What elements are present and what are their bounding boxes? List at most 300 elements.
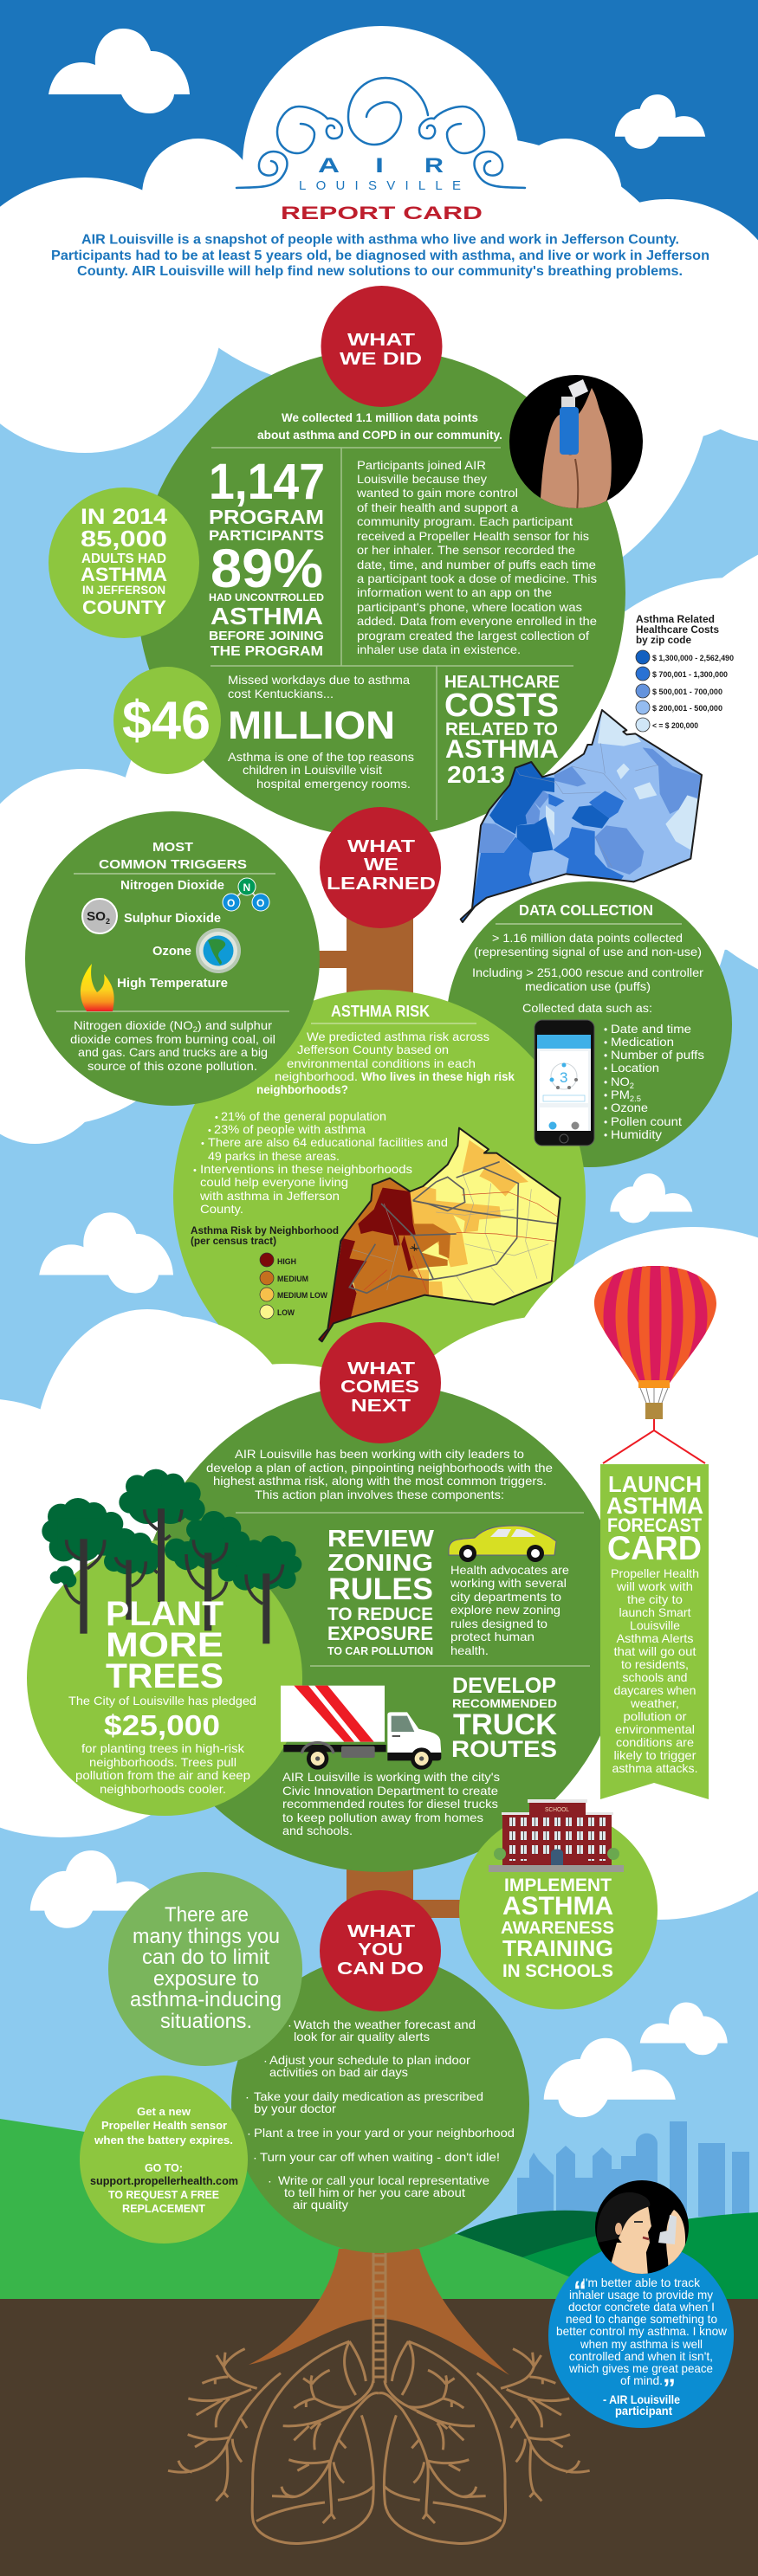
plant more trees heading: PLANT: [106, 1595, 224, 1633]
collected data list: Ozone: [611, 1101, 648, 1114]
legend: asthma risk: (per census tract): [191, 1235, 276, 1247]
trigger: high temperature: [81, 964, 228, 1011]
participants paragraph: [356, 458, 597, 656]
callout: many things you can do: can do to limit: [142, 1946, 269, 1969]
balloon hanging cord: [603, 1419, 705, 1463]
callout: replace sensor: TO REQUEST A FREE: [108, 2188, 219, 2201]
missed workdays text: MILLION: [228, 703, 395, 747]
stat: $46: [113, 667, 221, 774]
participants paragraph: Louisville because they: [357, 472, 487, 486]
callout: many things you can do: many things you: [133, 1925, 280, 1948]
trigger: ozone: [152, 928, 241, 973]
small cloud right of asthma risk: [610, 1173, 692, 1223]
small cloud top left: [49, 29, 190, 113]
asthma risk intro: Who lives in these high risk: [361, 1069, 515, 1083]
what you can do list: Turn your car off when waiting - don't idle!: [260, 2150, 500, 2164]
triggers explanation: dioxide comes from burning coal, oil: [70, 1032, 275, 1046]
data points statement: We collected 1.1 million data points: [282, 410, 478, 424]
trigger: nitrogen dioxide: O: [227, 897, 235, 909]
logo wordmark: LOUISVILLE: [299, 178, 461, 193]
collected data list: PM: [611, 1088, 629, 1101]
collected data list: 2: [630, 1081, 634, 1090]
banner body text: launch Smart: [619, 1605, 691, 1619]
what you can do list: to tell him or her you care about: [284, 2185, 465, 2199]
legend: healthcare costs: $ 200,001 - 500,000: [652, 704, 722, 713]
icon: smartphone app: [534, 1020, 594, 1146]
callout: participant quote: need to change something to: [566, 2312, 717, 2326]
missed workdays text: children in Louisville visit: [243, 763, 382, 777]
panel: asthma risk: ASTHMA RISK: [331, 1003, 430, 1020]
logo: [236, 78, 525, 188]
develop truck routes heading: TRUCK: [453, 1708, 557, 1741]
callout: participant quote: [548, 2243, 734, 2428]
data points statement: [257, 410, 502, 442]
asthma risk intro: neighborhood.: [275, 1069, 358, 1083]
intro text: [51, 232, 709, 279]
panel: plant more trees: [27, 1469, 302, 1816]
callout: many things you can do: There are: [165, 1903, 249, 1927]
what you can do list: ·: [288, 2022, 291, 2031]
trees pledge text: neighborhoods cooler.: [100, 1782, 226, 1796]
icon: school building: [489, 1799, 624, 1872]
callout: participant quote: “: [573, 2276, 586, 2305]
panel: most common triggers: [25, 811, 320, 1106]
participants paragraph: wanted to gain more control: [356, 486, 518, 500]
panel: data collection: [446, 881, 732, 1167]
callout: replace sensor: when the battery expires.: [94, 2134, 233, 2147]
heading: what comes next: NEXT: [351, 1397, 411, 1416]
stat: 85,000 adults: ADULTS HAD: [81, 552, 166, 566]
participants paragraph: of their health and support a: [357, 500, 518, 514]
asthma risk bullets: There are also 64 educational facilities and: [208, 1135, 448, 1149]
callout: participant quote: better control my asthma. I know: [556, 2324, 728, 2338]
data collection summary: > 1.16 million data points collected: [492, 931, 683, 945]
action plan intro: highest asthma risk, along with the most common triggers.: [213, 1474, 547, 1488]
review zoning rules heading: REVIEW: [327, 1525, 435, 1552]
trigger: high temperature: High Temperature: [117, 977, 228, 991]
participants paragraph: program created the largest collection of: [357, 629, 589, 642]
callout: participant quote: participant: [615, 2404, 672, 2418]
panel: implement asthma awareness training: IN SCHOOLS: [502, 1961, 613, 1981]
plant more trees heading: TREES: [106, 1657, 224, 1695]
collected data list: Humidity: [611, 1127, 662, 1141]
heading: what we learned: [320, 807, 441, 928]
banner body text: to residents,: [621, 1657, 689, 1671]
data collection summary: [472, 931, 703, 1015]
action plan intro: develop a plan of action, pinpointing neighborhoods with the: [206, 1461, 553, 1475]
trees pledge text: [68, 1694, 256, 1796]
heading: what we did: WE DID: [340, 350, 422, 369]
review zoning rules heading: EXPOSURE: [327, 1623, 433, 1644]
truck routes paragraph: to keep pollution away from homes: [282, 1811, 483, 1824]
zoning paragraph: protect human: [450, 1630, 534, 1643]
triggers explanation: [70, 1018, 275, 1073]
participants paragraph: participant's phone, where location was: [357, 600, 582, 614]
collected data list: •: [604, 1089, 607, 1101]
callout: participant quote: of mind.: [620, 2373, 663, 2387]
asthma risk intro: neighborhoods?: [256, 1082, 348, 1096]
lower white clouds: [0, 1227, 758, 1920]
what you can do list: look for air quality alerts: [294, 2030, 430, 2043]
develop truck routes heading: DEVELOP: [452, 1674, 556, 1698]
tree trunk middle section: [347, 1853, 468, 1918]
heading: what we learned: WHAT: [347, 837, 415, 856]
small cloud right lower: [544, 2038, 676, 2117]
zoning paragraph: explore new zoning: [450, 1603, 560, 1617]
banner body text: schools and: [622, 1670, 688, 1684]
heading: what you can do: YOU: [358, 1940, 403, 1959]
triggers explanation: and gas. Cars and trucks are a big: [78, 1045, 268, 1059]
callout: participant quote: inhaler usage to provide my: [569, 2288, 713, 2302]
small cloud right upper: [640, 2002, 728, 2055]
participants paragraph: Participants joined AIR: [357, 458, 486, 472]
illustration: woman using inhaler: [593, 2179, 690, 2276]
asthma risk bullets: [193, 1109, 448, 1216]
legend: asthma risk: HIGH: [277, 1257, 296, 1266]
data collection summary: Including > 251,000 rescue and controller: [472, 965, 703, 979]
stat: 85,000 adults: 85,000: [81, 526, 167, 552]
banner body text: conditions are: [616, 1735, 694, 1749]
triggers explanation: 2: [193, 1025, 198, 1034]
healthcare costs heading: COSTS: [444, 688, 559, 724]
plant more trees heading: [106, 1595, 224, 1695]
banner body text: Propeller Health: [611, 1566, 699, 1580]
missed workdays text: [228, 673, 414, 791]
action plan intro: AIR Louisville has been working with city leaders to: [235, 1447, 524, 1461]
collected data list: Date and time: [611, 1022, 691, 1036]
callout: replace sensor: [80, 2076, 248, 2244]
panel: launch asthma forecast card banner: CARD: [607, 1530, 702, 1567]
triggers explanation: Nitrogen dioxide (NO: [74, 1018, 187, 1032]
review zoning rules heading: [327, 1525, 435, 1657]
icon: school building: SCHOOL: [545, 1805, 569, 1813]
what you can do list: Plant a tree in your yard or your neighborhood: [254, 2126, 515, 2140]
panel: what comes next: [137, 1384, 625, 1872]
develop truck routes heading: ROUTES: [451, 1736, 557, 1762]
heading: what we learned: WE: [364, 855, 398, 875]
callout: many things you can do: situations.: [160, 2010, 252, 2033]
banner body text: environmental: [615, 1722, 695, 1736]
truck routes paragraph: recommended routes for diesel trucks: [282, 1797, 498, 1811]
banner body text: the city to: [627, 1592, 683, 1606]
trachea ladder: [373, 2250, 385, 2383]
collected data list: Number of puffs: [611, 1048, 704, 1062]
triggers explanation: ) and sulphur: [198, 1018, 272, 1032]
collected data list: •: [604, 1076, 607, 1088]
collected data list: Medication: [611, 1035, 674, 1049]
stat: 1,147 participants, 89%: PROGRAM: [209, 506, 324, 528]
stat: 85,000 adults: [49, 487, 199, 638]
what you can do list: Write or call your local representative: [278, 2173, 489, 2187]
participants paragraph: inhaler use data in existence.: [357, 642, 521, 656]
review zoning rules heading: TO REDUCE: [327, 1604, 433, 1624]
top white clouds: [0, 26, 758, 558]
callout: replace sensor: support.propellerhealth.com: [90, 2174, 238, 2187]
title: REPORT CARD: [281, 203, 483, 223]
stat: 1,147 participants, 89%: ASTHMA: [211, 603, 323, 629]
intro text: Participants had to be at least 5 years old, be diagnosed with asthma, and live or work in Jefferson: [51, 249, 709, 263]
asthma risk bullets: 49 parks in these areas.: [208, 1149, 340, 1163]
legend: healthcare costs: Asthma Related: [636, 615, 715, 625]
collected data list: •: [604, 1102, 607, 1114]
participants paragraph: community program. Each participant: [357, 514, 573, 528]
callout: participant quote: I'm better able to track: [582, 2276, 701, 2289]
asthma risk bullets: 23% of people with asthma: [214, 1122, 366, 1136]
participants paragraph: added. Data from everyone enrolled in the: [357, 614, 597, 628]
photo: hand with inhaler: [509, 375, 643, 508]
healthcare costs heading: RELATED TO: [445, 720, 558, 739]
banner body text: pollution or: [624, 1709, 687, 1723]
trigger: sulphur dioxide: 2: [106, 917, 110, 926]
legend: healthcare costs: [636, 615, 734, 732]
asthma risk intro: environmental conditions in each: [287, 1056, 476, 1070]
trees pledge text: neighborhoods. Trees pull: [89, 1755, 236, 1769]
data collection summary: medication use (puffs): [525, 979, 651, 993]
truck routes paragraph: AIR Louisville is working with the city's: [282, 1770, 500, 1784]
panel: implement asthma awareness training: TRAINING: [502, 1935, 613, 1961]
map: asthma risk by neighborhood: [318, 1127, 561, 1342]
collected data list: [604, 1022, 704, 1141]
panel: launch asthma forecast card banner: LAUNCH: [608, 1471, 702, 1497]
truck routes paragraph: Civic Innovation Department to create: [282, 1784, 498, 1798]
stat: 85,000 adults: IN JEFFERSON: [82, 583, 165, 597]
collected data list: •: [604, 1129, 607, 1141]
healthcare costs heading: 2013: [447, 761, 505, 788]
asthma risk intro: [256, 1030, 515, 1096]
action plan intro: [206, 1447, 553, 1501]
zoning paragraph: working with several: [450, 1576, 567, 1590]
middle white clouds: [0, 528, 758, 1178]
callout: replace sensor: GO TO:: [145, 2161, 183, 2174]
collected data list: •: [604, 1116, 607, 1128]
collected data list: •: [604, 1049, 607, 1062]
collected data list: 2.5: [630, 1094, 641, 1103]
what you can do list: [246, 2018, 515, 2211]
logo wordmark: A: [318, 154, 340, 178]
asthma risk intro: Jefferson County based on: [297, 1043, 449, 1056]
trigger: nitrogen dioxide: Nitrogen Dioxide: [120, 879, 224, 893]
what you can do list: Take your daily medication as prescribed: [254, 2089, 483, 2103]
stat: 1,147 participants, 89%: BEFORE JOINING: [209, 629, 324, 643]
legend: healthcare costs: Healthcare Costs: [636, 625, 719, 636]
truck routes paragraph: [282, 1770, 500, 1837]
panel: launch asthma forecast card banner: [600, 1464, 709, 1799]
hills: [0, 2119, 758, 2299]
legend: asthma risk: [191, 1224, 339, 1319]
panel: most common triggers: MOST: [152, 840, 193, 855]
heading: what comes next: COMES: [340, 1378, 419, 1397]
logo wordmark: R: [424, 154, 444, 178]
what you can do list: ·: [254, 2154, 256, 2164]
panel: implement asthma awareness training: [459, 1799, 658, 2009]
banner body text: that will go out: [613, 1644, 696, 1658]
zoning paragraph: [450, 1563, 569, 1657]
legend: healthcare costs: < = $ 200,000: [652, 721, 698, 730]
logo wordmark: [299, 154, 461, 193]
develop truck routes heading: [451, 1674, 557, 1762]
asthma risk bullets: 21% of the general population: [221, 1109, 386, 1123]
collected data list: •: [604, 1062, 607, 1075]
participants paragraph: date, time, and number of puffs each time: [357, 558, 596, 571]
asthma risk bullets: with asthma in Jefferson: [199, 1189, 340, 1203]
heading: what we did: WHAT: [347, 331, 415, 350]
missed workdays text: Missed workdays due to asthma: [228, 673, 410, 687]
heading: what you can do: [320, 1890, 441, 2011]
banner body text: [611, 1566, 699, 1775]
what you can do list: Watch the weather forecast and: [294, 2018, 476, 2031]
legend: asthma risk: MEDIUM: [277, 1275, 308, 1283]
banner body text: asthma attacks.: [612, 1761, 698, 1775]
heading: what you can do: WHAT: [347, 1922, 415, 1941]
what you can do list: activities on bad air days: [269, 2065, 408, 2079]
stat: 1,147 participants, 89%: THE PROGRAM: [211, 644, 323, 659]
zoning paragraph: rules designed to: [450, 1617, 547, 1630]
icon: truck: [281, 1686, 441, 1770]
truck routes paragraph: and schools.: [282, 1824, 353, 1837]
missed workdays text: Asthma is one of the top reasons: [228, 750, 414, 764]
zoning paragraph: health.: [450, 1643, 489, 1657]
legend: healthcare costs: $ 500,001 - 700,000: [652, 688, 722, 696]
trigger: nitrogen dioxide: N: [243, 881, 250, 894]
stat: 1,147 participants, 89%: [209, 454, 325, 659]
data collection summary: Collected data such as:: [522, 1001, 652, 1015]
healthcare costs heading: [444, 673, 560, 788]
zoning paragraph: city departments to: [450, 1590, 561, 1604]
what you can do list: ·: [246, 2094, 249, 2103]
small cloud bottom left: [30, 1850, 159, 1928]
zoning paragraph: Health advocates are: [450, 1563, 569, 1577]
participants paragraph: a participant took a dose of medicine. This: [357, 571, 597, 585]
panel: launch asthma forecast card banner: ASTHMA: [606, 1493, 703, 1519]
banner body text: Louisville: [630, 1618, 680, 1632]
stat: 1,147 participants, 89%: 1,147: [209, 454, 325, 510]
participants paragraph: information went to an app on the: [357, 585, 552, 599]
trigger: ozone: Ozone: [152, 945, 191, 959]
participants paragraph: received a Propeller Health sensor for his: [357, 529, 589, 543]
heading: what you can do: CAN DO: [337, 1959, 424, 1979]
trigger: sulphur dioxide: SO: [87, 909, 106, 924]
trees pledge text: pollution from the air and keep: [75, 1768, 250, 1782]
collected data list: Pollen count: [611, 1114, 682, 1128]
triggers explanation: source of this ozone pollution.: [87, 1059, 257, 1073]
stat: 1,147 participants, 89%: PARTICIPANTS: [209, 527, 324, 544]
intro text: AIR Louisville is a snapshot of people with asthma who live and work in Jefferson County.: [81, 232, 679, 248]
collected data list: NO: [611, 1075, 629, 1088]
panel: what we did: [137, 349, 625, 837]
heading: what we did: [321, 286, 442, 407]
legend: healthcare costs: $ 1,300,000 - 2,562,490: [652, 654, 734, 662]
banner body text: will work with: [616, 1579, 693, 1593]
asthma risk bullets: Interventions in these neighborhoods: [200, 1162, 412, 1176]
map: healthcare costs by zip code: [459, 709, 703, 923]
callout: participant quote: doctor concrete data when I: [568, 2300, 715, 2314]
stat: 85,000 adults: ASTHMA: [81, 564, 167, 585]
collected data list: •: [604, 1023, 607, 1036]
trigger: sulphur dioxide: [82, 899, 221, 933]
icon: hot air balloon: [594, 1266, 716, 1464]
callout: replace sensor: Propeller Health sensor: [101, 2119, 227, 2132]
asthma risk bullets: County.: [200, 1202, 243, 1216]
what you can do list: ·: [269, 2178, 271, 2187]
asthma risk bullets: •: [193, 1165, 197, 1176]
asthma risk bullets: •: [201, 1139, 204, 1149]
small cloud top right: [615, 94, 705, 149]
intro text: County. AIR Louisville will help find new solutions to our community's breathing problems.: [77, 264, 683, 279]
trigger: nitrogen dioxide: [120, 878, 269, 911]
asthma risk bullets: •: [215, 1113, 218, 1123]
review zoning rules heading: RULES: [328, 1572, 433, 1606]
callout: participant quote: - AIR Louisville: [603, 2392, 680, 2406]
trees pledge text: for planting trees in high-risk: [81, 1741, 245, 1755]
illustration: lungs as roots: [168, 2341, 590, 2543]
callout: many things you can do: asthma-inducing: [130, 1988, 282, 2011]
stat: 85,000 adults: COUNTY: [82, 597, 166, 618]
missed workdays text: cost Kentuckians...: [228, 687, 334, 700]
city skyline: [517, 2121, 749, 2217]
plant more trees heading: MORE: [106, 1626, 224, 1664]
panel: launch asthma forecast card banner: FORECAST: [607, 1514, 703, 1536]
callout: many things you can do: exposure to: [153, 1967, 259, 1991]
icon: smartphone app: 3: [560, 1069, 567, 1086]
stat: 85,000 adults: IN 2014: [81, 505, 167, 529]
asthma risk bullets: could help everyone living: [200, 1175, 348, 1189]
stat: 1,147 participants, 89%: 89%: [211, 539, 323, 599]
callout: replace sensor: REPLACEMENT: [122, 2202, 205, 2215]
callout: participant quote: when my asthma is well: [580, 2337, 703, 2351]
healthcare costs heading: ASTHMA: [445, 735, 559, 764]
what you can do list: Adjust your schedule to plan indoor: [269, 2053, 470, 2067]
develop truck routes heading: RECOMMENDED: [452, 1696, 557, 1710]
review zoning rules heading: ZONING: [327, 1549, 433, 1576]
tree trunk base: [249, 2249, 509, 2375]
what we did dividers: [211, 448, 573, 820]
what you can do list: ·: [264, 2057, 267, 2067]
callout: participant quote: controlled and when it isn't,: [569, 2349, 713, 2363]
action plan intro: This action plan involves these components:: [255, 1488, 504, 1501]
what you can do list: by your doctor: [254, 2101, 336, 2115]
panel: implement asthma awareness training: IMPLEMENT: [504, 1876, 612, 1895]
heading: what we learned: LEARNED: [327, 875, 436, 894]
legend: healthcare costs: $ 700,001 - 1,300,000: [652, 670, 728, 679]
banner body text: daycares when: [613, 1683, 696, 1697]
asthma risk intro: We predicted asthma risk across: [307, 1030, 489, 1043]
legend: healthcare costs: by zip code: [636, 636, 691, 646]
heading: what comes next: [320, 1322, 441, 1443]
icon: yellow car: [449, 1526, 556, 1562]
callout: participant quote: which gives me great peace: [568, 2361, 713, 2375]
trees pledge text: $25,000: [104, 1709, 220, 1741]
heading: what comes next: WHAT: [347, 1359, 415, 1378]
banner body text: Asthma Alerts: [617, 1631, 693, 1645]
trigger: nitrogen dioxide: O: [256, 897, 264, 909]
healthcare costs heading: HEALTHCARE: [444, 673, 560, 692]
panel: asthma risk: [173, 990, 586, 1402]
panel: implement asthma awareness training: AWARENESS: [501, 1919, 614, 1938]
trigger: sulphur dioxide: Sulphur Dioxide: [124, 912, 221, 926]
participants paragraph: or her inhaler. The sensor recorded the: [357, 543, 575, 557]
collected data list: •: [604, 1036, 607, 1049]
panel: data collection: DATA COLLECTION: [519, 901, 653, 919]
review zoning rules heading: TO CAR POLLUTION: [327, 1644, 433, 1657]
callout: many things you can do: [108, 1872, 302, 2066]
missed workdays text: hospital emergency rooms.: [256, 777, 411, 791]
stat: 1,147 participants, 89%: HAD UNCONTROLLED: [209, 591, 324, 604]
banner body text: weather,: [630, 1696, 679, 1710]
callout: participant quote: ”: [663, 2374, 676, 2403]
data points statement: about asthma and COPD in our community.: [257, 428, 502, 442]
what you can do list: air quality: [293, 2198, 348, 2211]
panel: implement asthma awareness training: ASTHMA: [502, 1892, 613, 1921]
